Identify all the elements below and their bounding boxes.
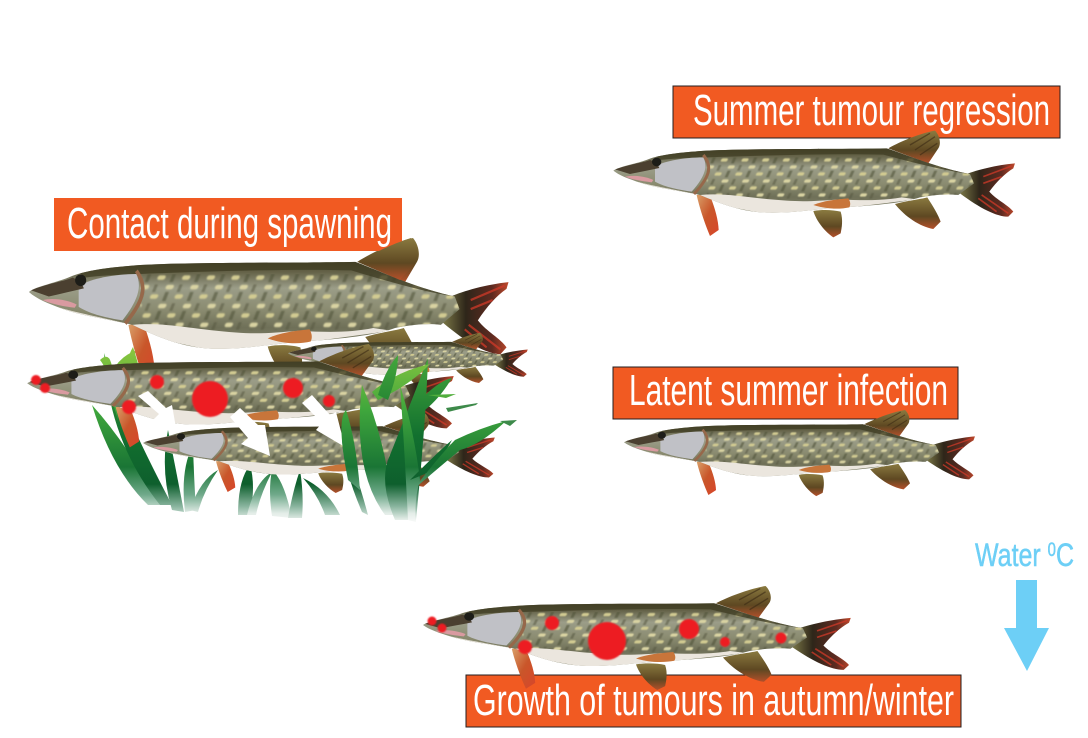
background plants [92,347,340,518]
tumours on autumn pike [428,616,786,660]
arrows: tumour transmission [138,391,345,456]
fish: healthy pike in summer [613,131,1015,237]
label box: growth of tumours [466,675,961,727]
water temperature label: Water [975,537,1059,573]
tumours on spawning pike [31,375,335,417]
label: latent summer infection [613,366,958,419]
label: latent summer infection: Latent summer infection [629,366,948,415]
label box: summer tumour regression [673,86,1060,138]
fish: large pike at spawning [29,238,509,382]
fish: lower pike at spawning [143,413,495,493]
label: contact during spawning: Contact during spawning [67,199,392,248]
fish: pike with tumours in autumn/winter [423,586,851,690]
fish: latent infected pike [624,410,975,496]
dorsal fin over spawning label [358,238,418,280]
foreground plants [341,355,517,522]
label: contact during spawning [54,198,402,251]
fish: tumour-bearing pike at spawning [27,344,454,449]
arrow: falling water temperature [1004,580,1049,671]
water temperature label: C [1056,537,1074,573]
water temperature label: 0 [1048,540,1056,561]
fish: small pike at spawning [288,333,528,387]
